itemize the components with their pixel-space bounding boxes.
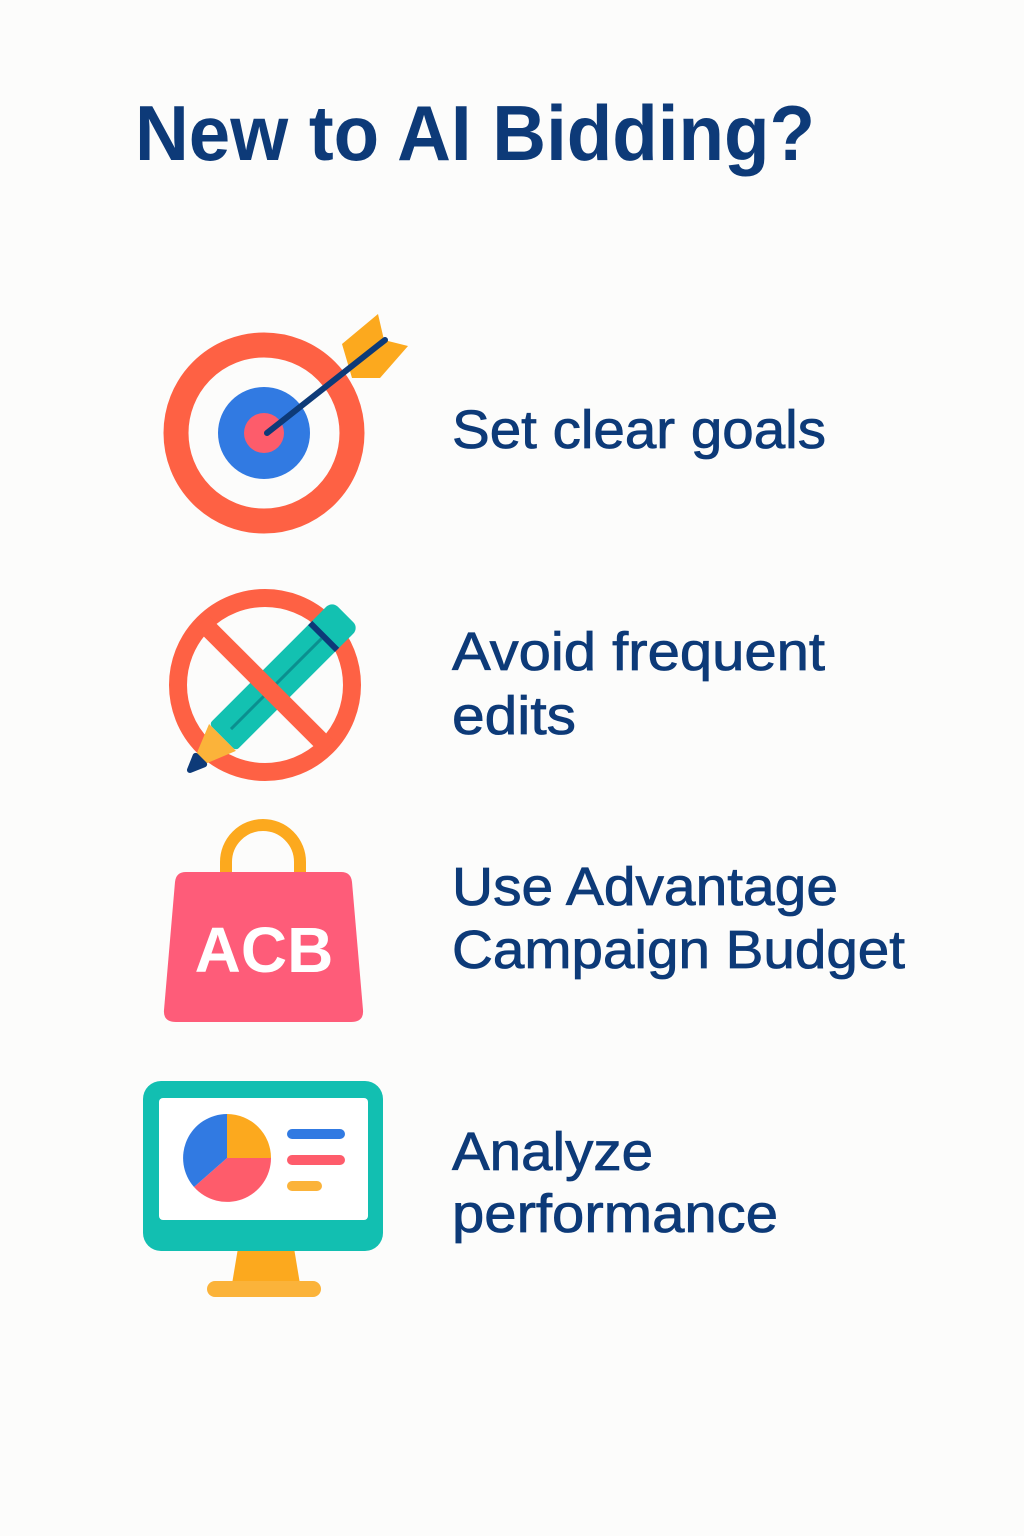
icon: target with arrow (176, 314, 408, 521)
icon: ACB bag: ACB (195, 914, 333, 986)
text: Campaign Budget (452, 920, 905, 980)
text: performance (452, 1184, 778, 1244)
text: use advantage campaign budget: Use Advantage (452, 857, 838, 917)
text: set clear goals: Set clear goals (452, 400, 826, 460)
icon: monitor with chart (143, 1081, 383, 1297)
icon: ACB bag (164, 825, 363, 1022)
title: New to AI Bidding? (135, 89, 815, 177)
text: avoid frequent edits: Avoid frequent (452, 622, 825, 682)
text: analyze performance: Analyze (452, 1122, 653, 1182)
icon: no-edit pencil (177, 598, 359, 783)
text: edits (452, 686, 576, 746)
